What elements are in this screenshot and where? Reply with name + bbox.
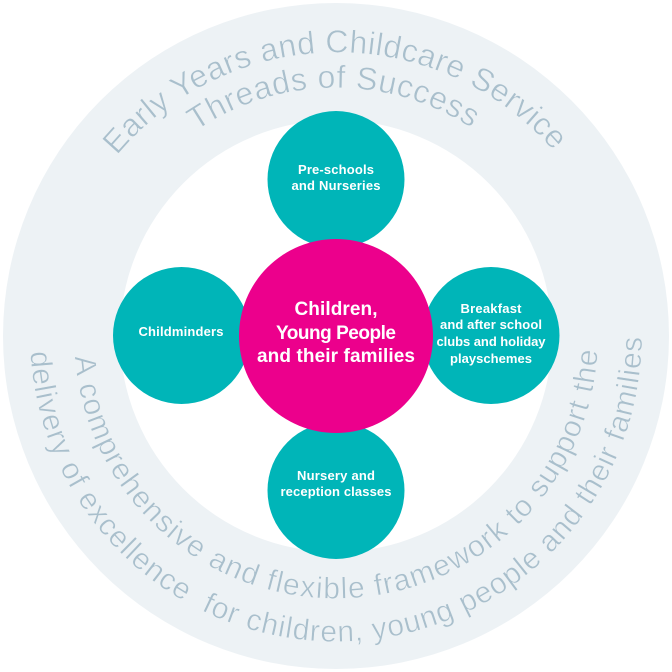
circle: Pre-schools and Nurseries: and Nurseries [292, 178, 380, 193]
circle: Childminders: Childminders [138, 324, 224, 339]
centre circle: Children, Young People and their families: and their families [257, 346, 415, 367]
centre circle: Children, Young People and their families: Children, [294, 299, 378, 320]
circle: Nursery and reception classes [268, 422, 404, 559]
circle: Nursery and reception classes: Nursery and [297, 468, 375, 483]
ring title: Threads of Success: Threads of Success [185, 65, 477, 126]
circle: Pre-schools and Nurseries: Pre-schools [298, 162, 374, 177]
circle: Breakfast and after school clubs [422, 267, 560, 404]
centre circle: Children, Young People and their families: Young People [276, 323, 396, 344]
circle: Pre-schools and Nurseries [268, 111, 404, 248]
circle: Breakfast and after school clubs: Breakfast [460, 301, 522, 316]
ring text: inner line: A comprehensive and flexible framework to support the [75, 351, 598, 599]
ring text: outer line: delivery of excellence for children, young people and their families [30, 338, 642, 646]
circle: Childminders [113, 267, 250, 404]
circle: Breakfast and after school clubs: clubs and holiday [436, 334, 546, 349]
ring title: Early Years and Childcare Service: Early Years and Childcare Service [102, 30, 562, 153]
circle: Nursery and reception classes: reception classes [280, 484, 392, 499]
circle: Breakfast and after school clubs: and after school [440, 317, 542, 332]
centre circle: Children, Young People and their families [239, 239, 433, 433]
circle: Breakfast and after school clubs: playschemes [450, 351, 532, 366]
